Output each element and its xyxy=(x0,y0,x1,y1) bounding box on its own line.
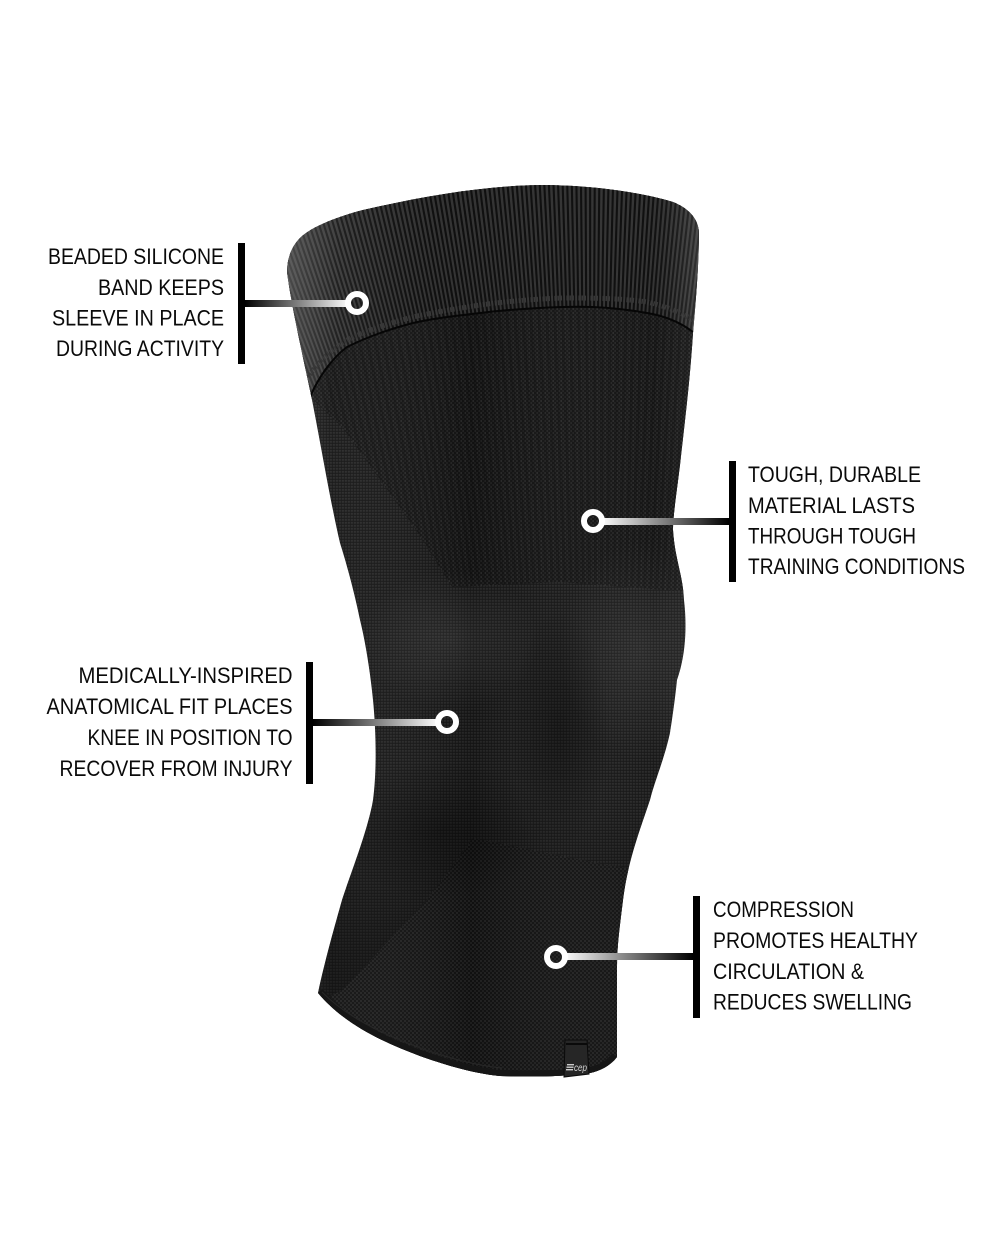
marker dot xyxy=(547,948,565,966)
marker dot xyxy=(438,713,456,731)
upper panel: pique knit xyxy=(311,308,694,592)
knee: fine knit base xyxy=(280,180,705,1080)
cep label tag: cep xyxy=(574,1063,587,1074)
bracket bar xyxy=(306,662,313,784)
callout text: silicone band: BAND KEEPS xyxy=(98,275,224,300)
lower leg: darkening toward hem xyxy=(318,847,634,1076)
callout text: anatomical fit xyxy=(46,663,293,781)
callout text: anatomical fit: KNEE IN POSITION TO xyxy=(88,725,292,750)
callout text: durable material: TOUGH, DURABLE xyxy=(748,462,921,487)
bracket bar xyxy=(238,243,245,364)
callout text: anatomical fit: MEDICALLY-INSPIRED xyxy=(78,663,292,688)
callout text: compression: REDUCES SWELLING xyxy=(713,990,912,1014)
callout: durable material xyxy=(584,461,965,582)
band seam xyxy=(308,298,693,397)
bottom hem xyxy=(318,993,617,1077)
callout text: silicone band: DURING ACTIVITY xyxy=(56,336,224,361)
callout text: durable material: TRAINING CONDITIONS xyxy=(748,554,965,579)
callout: anatomical fit xyxy=(46,662,456,784)
callout text: anatomical fit: RECOVER FROM INJURY xyxy=(60,756,293,781)
connector line xyxy=(245,300,350,307)
callout: compression xyxy=(547,896,918,1018)
bracket bar xyxy=(729,461,736,582)
callout text: durable material: THROUGH TOUGH xyxy=(748,524,916,548)
callout text: durable material xyxy=(748,462,965,579)
knee sleeve product xyxy=(270,180,720,1080)
connector line xyxy=(313,719,440,726)
callout text: silicone band xyxy=(48,244,224,361)
bracket bar xyxy=(693,896,700,1018)
top band: ribbed fabric xyxy=(287,185,699,395)
callout text: compression xyxy=(713,897,918,1014)
callout text: compression: CIRCULATION & xyxy=(713,959,864,984)
connector line xyxy=(563,953,693,960)
callout text: silicone band: BEADED SILICONE xyxy=(48,244,224,269)
callout text: compression: PROMOTES HEALTHY xyxy=(713,928,918,953)
knee: volume shading xyxy=(312,326,693,1028)
callout text: durable material: MATERIAL LASTS xyxy=(748,493,915,518)
callout text: compression: COMPRESSION xyxy=(713,897,854,922)
marker dot xyxy=(584,512,602,530)
marker dot xyxy=(348,294,366,312)
cep label tag xyxy=(564,1040,589,1077)
callout: silicone band xyxy=(48,243,366,364)
callout text: anatomical fit: ANATOMICAL FIT PLACES xyxy=(46,694,292,719)
lower panel: dotted knit xyxy=(324,838,629,1076)
connector line xyxy=(600,518,729,525)
callout text: silicone band: SLEEVE IN PLACE xyxy=(52,306,224,330)
